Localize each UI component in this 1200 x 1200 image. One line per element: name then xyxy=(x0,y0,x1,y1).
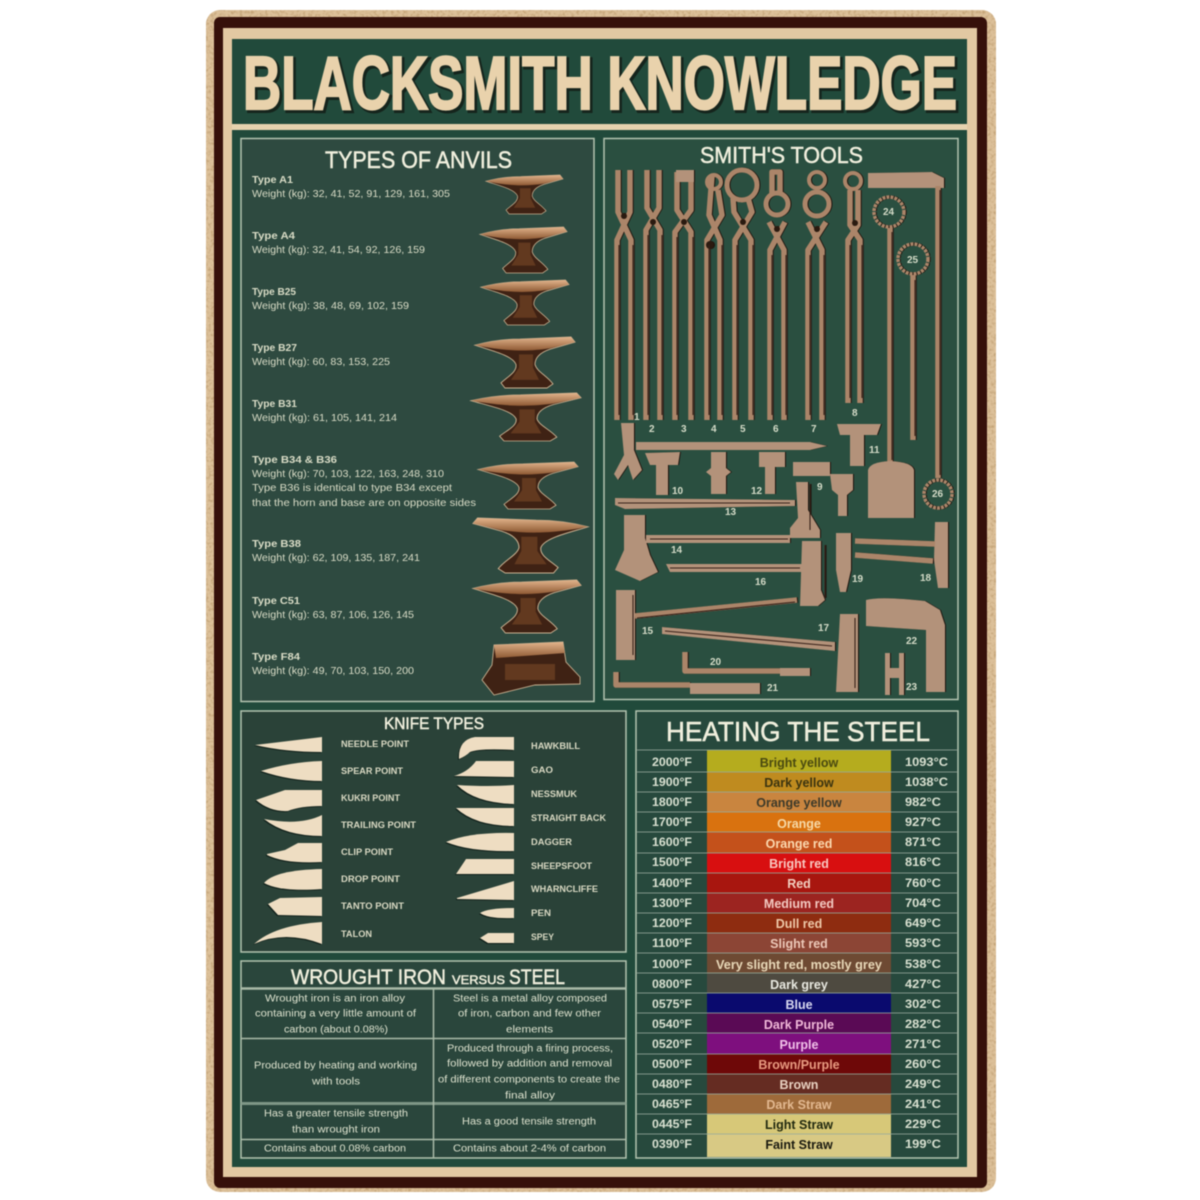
colour name column: Bright red xyxy=(769,857,829,871)
celsius column: 427°C xyxy=(905,979,941,991)
icon: anvil B34 xyxy=(478,462,578,509)
anvil list text: Type F84 xyxy=(252,651,300,663)
anvil list text: Type B34 & B36 xyxy=(252,454,337,466)
panel: wrought iron versus steel xyxy=(241,961,626,1158)
comparison text: wrought iron: carbon (about 0.08%) xyxy=(284,1024,388,1036)
comparison table grid xyxy=(241,988,626,1158)
icon: anvil B25 xyxy=(481,280,569,325)
celsius column: 282°C xyxy=(905,1019,941,1031)
comparison text: steel xyxy=(438,994,620,1154)
knife labels right column: STRAIGHT BACK xyxy=(531,813,606,824)
anvil list text: Weight (kg): 61, 105, 141, 214 xyxy=(252,412,397,424)
knife labels right column: GAO xyxy=(531,765,553,776)
celsius column: 249°C xyxy=(905,1079,941,1091)
celsius column: 593°C xyxy=(905,938,941,950)
anvil list text: Weight (kg): 63, 87, 106, 126, 145 xyxy=(252,609,414,621)
comparison text: steel: Contains about 2-4% of carbon xyxy=(453,1144,606,1154)
celsius column: 241°C xyxy=(905,1099,941,1111)
tool number labels: 3 xyxy=(681,424,687,435)
tool number labels: 15 xyxy=(642,626,654,637)
icon: anvil A4 xyxy=(480,227,567,273)
colour name column: Red xyxy=(787,877,811,891)
heading: types of anvils: TYPES OF ANVILS xyxy=(325,147,512,174)
tool number labels: 23 xyxy=(906,682,918,693)
fahrenheit column: 1700°F xyxy=(652,817,692,829)
comparison text: wrought iron: Contains about 0.08% carbon xyxy=(264,1144,406,1154)
anvil list text: that the horn and base are on opposite sides xyxy=(252,497,476,509)
fahrenheit column: 1800°F xyxy=(652,797,692,809)
icon: anvil B27 xyxy=(475,337,575,388)
knife labels right column: PEN xyxy=(531,908,551,919)
metal sign frame xyxy=(206,10,996,1192)
knife labels right column: DAGGER xyxy=(531,837,572,848)
comparison text: steel: of iron, carbon and few other xyxy=(458,1008,602,1020)
celsius column: 982°C xyxy=(905,797,941,809)
icon: anvil B31 xyxy=(471,393,581,441)
fahrenheit column: 0520°F xyxy=(652,1039,692,1051)
comparison text: wrought iron: with tools xyxy=(311,1076,360,1088)
tool number labels: 22 xyxy=(906,636,918,647)
colour name column: Orange red xyxy=(766,837,832,851)
colour name column: Light Straw xyxy=(765,1118,833,1132)
tool number labels: 10 xyxy=(672,486,684,497)
panel: heating the steel xyxy=(636,711,958,1158)
celsius column: 229°C xyxy=(905,1119,941,1131)
fahrenheit column: 1500°F xyxy=(652,857,692,869)
colour temperature bands xyxy=(707,750,891,1157)
knife labels left column: TANTO POINT xyxy=(341,901,404,912)
forge stakes and small tools 9 10 11 12 xyxy=(614,423,881,516)
long tools 24 25 26 and shovel xyxy=(868,172,952,518)
colour name column: Dark yellow xyxy=(764,776,834,790)
celsius column: 260°C xyxy=(905,1059,941,1071)
icon: anvil B38 xyxy=(473,518,588,573)
comparison text: wrought iron: Produced by heating and working xyxy=(254,1060,417,1072)
celsius column: 1038°C xyxy=(905,777,948,789)
tool number labels: 8 xyxy=(852,408,858,419)
fahrenheit column: 1300°F xyxy=(652,898,692,910)
celsius column: 538°C xyxy=(905,959,941,971)
tool number labels: 24 xyxy=(883,207,895,218)
anvil list text: Type B36 is identical to type B34 except xyxy=(252,482,452,494)
fahrenheit column: 0575°F xyxy=(652,999,692,1011)
tool number labels: 2 xyxy=(649,424,655,435)
knife labels left column: TRAILING POINT xyxy=(341,820,416,831)
comparison text: wrought iron: than wrought iron xyxy=(292,1124,380,1136)
anvil list text: Weight (kg): 32, 41, 54, 92, 126, 159 xyxy=(252,244,425,256)
knife labels right column: WHARNCLIFFE xyxy=(531,884,598,895)
comparison text: steel: followed by addition and removal xyxy=(447,1058,612,1070)
colour name column: Dark Purple xyxy=(764,1018,834,1032)
comparison text: steel: Produced through a firing process, xyxy=(447,1044,613,1054)
tool number labels: 1 xyxy=(634,412,640,423)
hammers 13 to 17 xyxy=(615,482,858,694)
knife labels left column: KUKRI POINT xyxy=(341,793,400,804)
heading: heating the steel: HEATING THE STEEL xyxy=(666,716,930,747)
tools 18 19 22 23 xyxy=(836,522,948,695)
fahrenheit column xyxy=(652,757,692,1151)
celsius column: 927°C xyxy=(905,817,941,829)
knife labels right column: SPEY xyxy=(531,932,555,943)
heading: wrought iron versus steel: VERSUS xyxy=(452,973,505,987)
colour name column: Dull red xyxy=(776,917,822,931)
colour name column: Bright yellow xyxy=(760,756,839,770)
knife labels left column: CLIP POINT xyxy=(341,847,393,858)
fahrenheit column: 0465°F xyxy=(652,1099,692,1111)
knife blades left column xyxy=(254,737,322,944)
anvil list text: Weight (kg): 60, 83, 153, 225 xyxy=(252,356,390,368)
heading: wrought iron versus steel xyxy=(291,966,565,989)
fahrenheit column: 1400°F xyxy=(652,878,692,890)
tool number labels: 25 xyxy=(907,255,919,266)
colour name column: Orange yellow xyxy=(756,796,842,810)
celsius column: 199°C xyxy=(905,1139,941,1151)
fahrenheit column: 1600°F xyxy=(652,837,692,849)
colour name column: Purple xyxy=(780,1038,818,1052)
knife labels left column xyxy=(341,739,416,940)
tool number labels: 4 xyxy=(711,424,717,435)
colour name column: Dark Straw xyxy=(766,1098,832,1112)
tool number labels: 9 xyxy=(817,482,823,493)
knife labels right column: NESSMUK xyxy=(531,789,577,800)
anvil list text: Weight (kg): 38, 48, 69, 102, 159 xyxy=(252,300,409,312)
knife labels left column: SPEAR POINT xyxy=(341,766,403,777)
anvil list text: Weight (kg): 49, 70, 103, 150, 200 xyxy=(252,665,414,677)
colour name column: Slight red xyxy=(770,937,828,951)
colour name column: Dark grey xyxy=(770,978,828,992)
tool number labels: 5 xyxy=(740,424,746,435)
tool number labels: 20 xyxy=(710,657,722,668)
colour name column: Faint Straw xyxy=(765,1138,833,1152)
colour name column: Brown xyxy=(780,1078,818,1092)
celsius column: 302°C xyxy=(905,999,941,1011)
tool number labels: 21 xyxy=(767,683,779,694)
anvil list text: Type B27 xyxy=(252,342,297,354)
anvil list text: Type B38 xyxy=(252,538,301,550)
celsius column: 871°C xyxy=(905,837,941,849)
fahrenheit column: 0445°F xyxy=(652,1119,692,1131)
row separators xyxy=(637,750,957,1134)
comparison text: wrought iron: Has a greater tensile strength xyxy=(264,1108,408,1120)
knife labels left column: DROP POINT xyxy=(341,874,400,885)
fahrenheit column: 1900°F xyxy=(652,777,692,789)
heading: wrought iron versus steel: STEEL xyxy=(509,966,565,989)
fahrenheit column: 0800°F xyxy=(652,979,692,991)
tool number labels: 13 xyxy=(725,507,737,518)
anvil list text: Type A4 xyxy=(252,230,295,242)
comparison text: steel: of different components to create the xyxy=(438,1074,620,1086)
anvil list text: Weight (kg): 70, 103, 122, 163, 248, 310 xyxy=(252,468,444,480)
tool number labels: 12 xyxy=(751,486,763,497)
anvil list text: Type B25 xyxy=(252,286,296,298)
fahrenheit column: 1000°F xyxy=(652,959,692,971)
tool number labels: 16 xyxy=(755,577,767,588)
knife labels left column: TALON xyxy=(341,929,372,940)
tool number labels: 11 xyxy=(869,445,880,456)
colour name column xyxy=(716,756,882,1152)
colour name column: Blue xyxy=(785,998,813,1012)
celsius column xyxy=(905,757,948,1151)
comparison text: wrought iron: Wrought iron is an iron alloy xyxy=(265,994,405,1004)
comparison text: wrought iron: containing a very little amount of xyxy=(255,1008,416,1020)
anvil list text: Weight (kg): 32, 41, 52, 91, 129, 161, 305 xyxy=(252,188,450,200)
panel: smith's tools xyxy=(604,138,958,700)
fahrenheit column: 0500°F xyxy=(652,1059,692,1071)
icon: anvil F84 xyxy=(482,642,580,695)
celsius column: 760°C xyxy=(905,878,941,890)
knife blades right column xyxy=(446,737,514,943)
tool number labels: 17 xyxy=(818,623,830,634)
anvil list text: Type B31 xyxy=(252,398,297,410)
anvil list text: Type A1 xyxy=(252,174,293,186)
anvil list text xyxy=(252,174,476,677)
celsius column: 816°C xyxy=(905,857,941,869)
fahrenheit column: 2000°F xyxy=(652,757,692,769)
anvil list text: Type C51 xyxy=(252,595,300,607)
tool number labels: 26 xyxy=(932,489,944,500)
celsius column: 271°C xyxy=(905,1039,941,1051)
fahrenheit column: 0390°F xyxy=(652,1139,692,1151)
panel: knife types xyxy=(241,711,626,952)
comparison text: steel: Has a good tensile strength xyxy=(462,1116,596,1128)
tool number labels: 14 xyxy=(671,545,683,556)
comparison text: steel: final alloy xyxy=(505,1090,555,1102)
knife labels right column: HAWKBILL xyxy=(531,741,580,752)
fahrenheit column: 1100°F xyxy=(652,938,692,950)
heading: knife types: KNIFE TYPES xyxy=(384,714,484,733)
anvil list text: Weight (kg): 62, 109, 135, 187, 241 xyxy=(252,552,420,564)
comparison text: wrought iron xyxy=(254,994,417,1154)
heading: smith's tools: SMITH'S TOOLS xyxy=(700,142,863,168)
colour name column: Orange xyxy=(777,817,821,831)
knife labels left column: NEEDLE POINT xyxy=(341,739,409,750)
colour name column: Very slight red, mostly grey xyxy=(716,958,882,972)
fahrenheit column: 0480°F xyxy=(652,1079,692,1091)
tool number labels: 6 xyxy=(773,424,779,435)
tool number labels xyxy=(634,207,944,694)
colour name column: Medium red xyxy=(764,897,834,911)
knife labels right column xyxy=(531,741,606,943)
fahrenheit column: 1200°F xyxy=(652,918,692,930)
heading: wrought iron versus steel: WROUGHT IRON xyxy=(291,966,446,989)
tool number labels: 19 xyxy=(852,574,864,585)
comparison text: steel: Steel is a metal alloy composed xyxy=(453,994,607,1004)
colour name column: Brown/Purple xyxy=(758,1058,840,1072)
tongs 1 to 8 xyxy=(617,170,862,420)
comparison text: steel: elements xyxy=(506,1024,553,1036)
celsius column: 704°C xyxy=(905,898,941,910)
celsius column: 649°C xyxy=(905,918,941,930)
knife labels right column: SHEEPSFOOT xyxy=(531,861,592,872)
tool number labels: 7 xyxy=(811,424,817,435)
icon: anvil A1 xyxy=(486,175,563,214)
panel: types of anvils xyxy=(241,138,594,702)
celsius column: 1093°C xyxy=(905,757,948,769)
tool number labels: 18 xyxy=(920,573,932,584)
fahrenheit column: 0540°F xyxy=(652,1019,692,1031)
icon: anvil C51 xyxy=(473,580,581,633)
